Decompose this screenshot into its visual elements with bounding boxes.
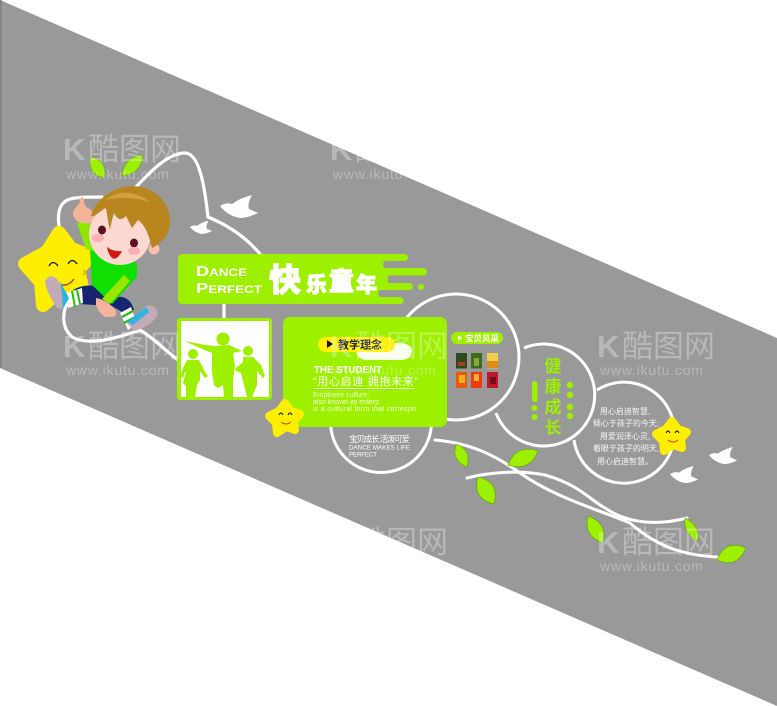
banner chinese title: 乐 <box>306 274 327 297</box>
vertical title healthy growth: 健 <box>544 357 562 376</box>
icon: top leaves <box>90 155 143 178</box>
silhouette: left child <box>180 349 208 397</box>
boy eyes <box>98 226 138 248</box>
watermark row two centre: K <box>330 329 353 364</box>
pill: baby gallery: 宝贝风采 <box>465 334 500 344</box>
watermark row one centre: www.ikutu.com <box>332 166 437 182</box>
text block: baby grows <box>349 434 410 458</box>
bottom-left text circle <box>330 372 432 472</box>
text block: baby grows: PERFECT <box>349 452 377 458</box>
watermark row one left <box>63 132 181 182</box>
english paragraph: also known as enterp <box>313 399 379 406</box>
photo box with running children silhouette <box>177 318 272 400</box>
circle: healthy growth <box>496 344 595 446</box>
watermark row two right: www.ikutu.com <box>599 362 704 378</box>
watermark row one left: 酷图网 <box>88 132 181 167</box>
heading text: 教学理念 <box>338 338 382 352</box>
watermark row two centre: www.ikutu.com <box>332 362 437 378</box>
banner: dance perfect <box>178 254 427 304</box>
banner chinese title <box>269 262 377 298</box>
watermark row two left: K <box>63 329 86 364</box>
icon: right star <box>656 421 687 451</box>
circle: poem <box>574 382 674 483</box>
vertical title healthy growth: 成 <box>544 397 562 417</box>
flower outline: white line behind the boy <box>58 153 260 360</box>
boy right leg and shoe <box>120 306 158 331</box>
large circle behind panel <box>393 294 519 420</box>
boy navy trousers <box>73 286 134 312</box>
boy green sweater <box>90 250 137 304</box>
english paragraph: Employee culture, <box>313 392 369 399</box>
banner english title: Dance <box>196 263 247 280</box>
watermark row one left: www.ikutu.com <box>65 166 170 182</box>
watermark row two left: www.ikutu.com <box>65 362 170 378</box>
poem text: 着眼于孩子的明天, <box>593 443 659 453</box>
watermark row two centre: 酷图网 <box>355 329 448 364</box>
decorative pills and dots <box>532 381 573 420</box>
banner chinese title: 快 <box>269 262 301 298</box>
leaves on vines <box>455 444 746 563</box>
text block: baby grows: DANCE MAKES LIFE <box>349 444 410 452</box>
watermark row three centre: K <box>330 525 353 560</box>
boy left leg and shoe <box>45 276 83 309</box>
english paragraph <box>313 392 416 413</box>
slogan: “用心启迪 拥抱未来” <box>313 374 418 388</box>
watermark row one centre: 酷图网 <box>355 132 448 167</box>
boy hair <box>91 186 170 248</box>
white blob <box>357 343 412 360</box>
silhouette: centre child <box>185 332 242 397</box>
watermark row two left: 酷图网 <box>88 329 181 364</box>
watermark row three right: K <box>597 525 620 560</box>
watermark row two right: K <box>597 329 620 364</box>
icon: big smiling star <box>25 233 90 305</box>
boy face <box>89 203 151 265</box>
vines <box>435 440 717 557</box>
banner chinese title: 童 <box>329 267 354 296</box>
panel: teaching philosophy <box>283 317 447 427</box>
pill: baby gallery <box>451 332 503 344</box>
illustration: cartoon boy <box>45 186 170 331</box>
watermark row two right: 酷图网 <box>622 329 715 364</box>
boy raised arm <box>77 221 95 252</box>
icon: doves top <box>190 195 258 234</box>
banner english title: Perfect <box>196 280 262 297</box>
heading text <box>327 338 382 352</box>
silhouette: right child <box>235 346 265 397</box>
yellow pill heading <box>318 337 395 352</box>
slogan <box>313 364 418 388</box>
poem text: 倾心于孩子的今天; <box>593 418 659 428</box>
watermark row three right: www.ikutu.com <box>599 558 704 574</box>
english paragraph: is a cultural form that correspo <box>313 406 416 413</box>
vertical title healthy growth: 长 <box>544 418 562 438</box>
banner chinese title: 年 <box>356 273 377 297</box>
boy mouth <box>107 247 122 259</box>
watermark row two centre <box>330 329 448 378</box>
watermark row one left: K <box>63 132 86 167</box>
poem text: 用心启迪智慧, <box>600 406 650 416</box>
boy raised hand <box>73 197 94 223</box>
watermark row three right: 酷图网 <box>622 525 715 560</box>
watermark row three centre: 酷图网 <box>355 525 448 560</box>
slogan: THE STUDENT <box>314 364 383 376</box>
boy cheeks <box>92 234 140 255</box>
watermark row one centre: K <box>330 132 353 167</box>
poem text: 用心启迪智慧。 <box>597 456 653 466</box>
watermark row two right <box>597 329 715 378</box>
icon: small star on panel corner <box>269 403 300 433</box>
poem text: 用爱润泽心灵, <box>600 431 650 441</box>
boy ear <box>148 244 160 254</box>
watermark row three right <box>597 525 715 574</box>
banner english title <box>196 263 262 297</box>
boy lower hand <box>96 298 116 317</box>
text block: baby grows: 宝贝成长 活泼可爱 <box>349 434 410 444</box>
photo thumbnails <box>456 353 498 388</box>
poem text <box>593 406 659 466</box>
vertical title healthy growth <box>544 357 562 438</box>
icon: doves right <box>670 447 737 483</box>
watermark row two left <box>63 329 181 378</box>
vertical title healthy growth: 康 <box>544 376 562 396</box>
watermark row one centre <box>330 132 448 182</box>
